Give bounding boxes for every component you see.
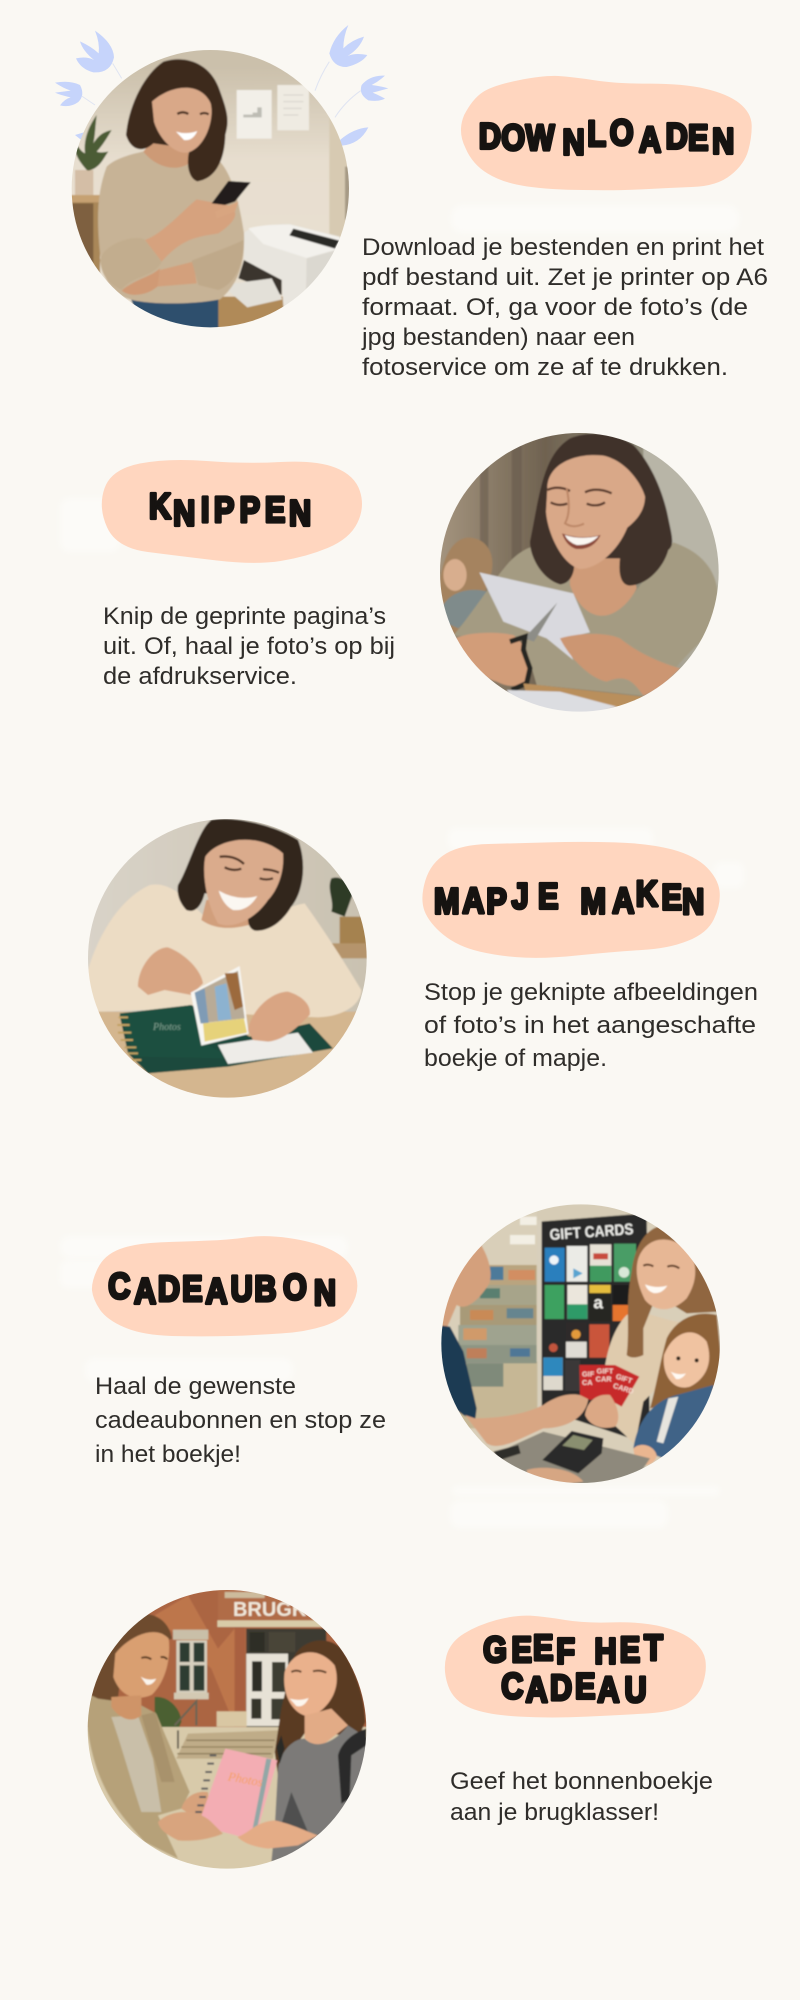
photo: buying gift cards: GIFT CARDS	[549, 1221, 634, 1244]
heading: geef het: GEEF HET	[483, 1629, 663, 1672]
photo: buying gift cards: CAR	[596, 1375, 612, 1384]
photo: handing over the gift	[85, 1587, 371, 1877]
photo: handing over the gift: Photos	[226, 1769, 264, 1789]
text: geef het cadeau body: Geef het bonnenboekje	[450, 1768, 713, 1795]
photo: buying gift cards: GIFT	[615, 1372, 634, 1386]
text: cadeaubon body: Haal de gewenste	[95, 1373, 296, 1400]
icon: blue leaves	[55, 25, 388, 146]
text: knippen body	[103, 603, 395, 690]
heading: downloaden: DOWNLOADEN	[479, 114, 734, 163]
text: downloaden body	[361, 234, 768, 381]
text: cadeaubon body: in het boekje!	[95, 1441, 241, 1468]
photo: buying gift cards: GIFT	[597, 1366, 614, 1375]
heading: cadeau: CADEAU	[501, 1667, 647, 1710]
photo: handing over the gift: BRUGK	[233, 1599, 307, 1621]
step 1: downloaden	[55, 25, 768, 381]
step 2: knippen	[103, 430, 723, 718]
heading: knippen: KNIPPEN	[149, 487, 311, 534]
heading: cadeaubon: CADEAUBON	[108, 1267, 336, 1314]
text: downloaden body: jpg bestanden) naar een	[361, 324, 635, 351]
step 3: mapje maken	[85, 815, 758, 1102]
photo: woman with phone and printer	[72, 50, 349, 328]
text: downloaden body: Download je bestenden en print het	[362, 234, 764, 261]
text: cadeaubon body: cadeaubonnen en stop ze	[95, 1407, 386, 1434]
label pill: knippen	[103, 461, 361, 562]
photo: buying gift cards: GIF	[582, 1370, 595, 1379]
photo: buying gift cards: CARD	[612, 1381, 635, 1396]
text: downloaden body: formaat. Of, ga voor de foto’s (de	[362, 294, 748, 321]
photo: buying gift cards: a	[593, 1292, 603, 1312]
text: downloaden body: pdf bestand uit. Zet je printer op A6	[362, 264, 768, 291]
text: mapje maken body: Stop je geknipte afbeeldingen	[424, 979, 758, 1006]
step 5: geef het cadeau	[85, 1587, 713, 1877]
photo: woman with album	[85, 815, 371, 1102]
label pill: cadeaubon	[93, 1237, 356, 1335]
heading: mapje maken: MAPJE MAKEN	[434, 875, 704, 923]
text: downloaden body: fotoservice om ze af te drukken.	[362, 354, 728, 381]
photo: buying gift cards: CA	[582, 1378, 593, 1387]
text: mapje maken body: of foto’s in het aangeschafte	[424, 1012, 756, 1039]
text: knippen body: de afdrukservice.	[103, 663, 297, 690]
text: knippen body: Knip de geprinte pagina’s	[103, 603, 386, 630]
text: mapje maken body: boekje of mapje.	[424, 1045, 607, 1072]
background smudges	[60, 205, 744, 1528]
text: cadeaubon body	[95, 1373, 386, 1468]
photo: woman cutting paper	[437, 430, 723, 718]
text: mapje maken body	[424, 979, 758, 1072]
text: geef het cadeau body	[450, 1768, 713, 1826]
label pill: mapje maken	[423, 843, 719, 957]
text: knippen body: uit. Of, haal je foto’s op bij	[103, 633, 395, 660]
label pill: geef het cadeau	[446, 1617, 705, 1716]
photo: buying gift cards	[437, 1200, 730, 1490]
step 4: cadeaubon	[93, 1200, 730, 1490]
label pill: downloaden	[462, 77, 750, 189]
photo: woman with album: Photos	[152, 1022, 181, 1033]
text: geef het cadeau body: aan je brugklasser!	[450, 1799, 659, 1826]
